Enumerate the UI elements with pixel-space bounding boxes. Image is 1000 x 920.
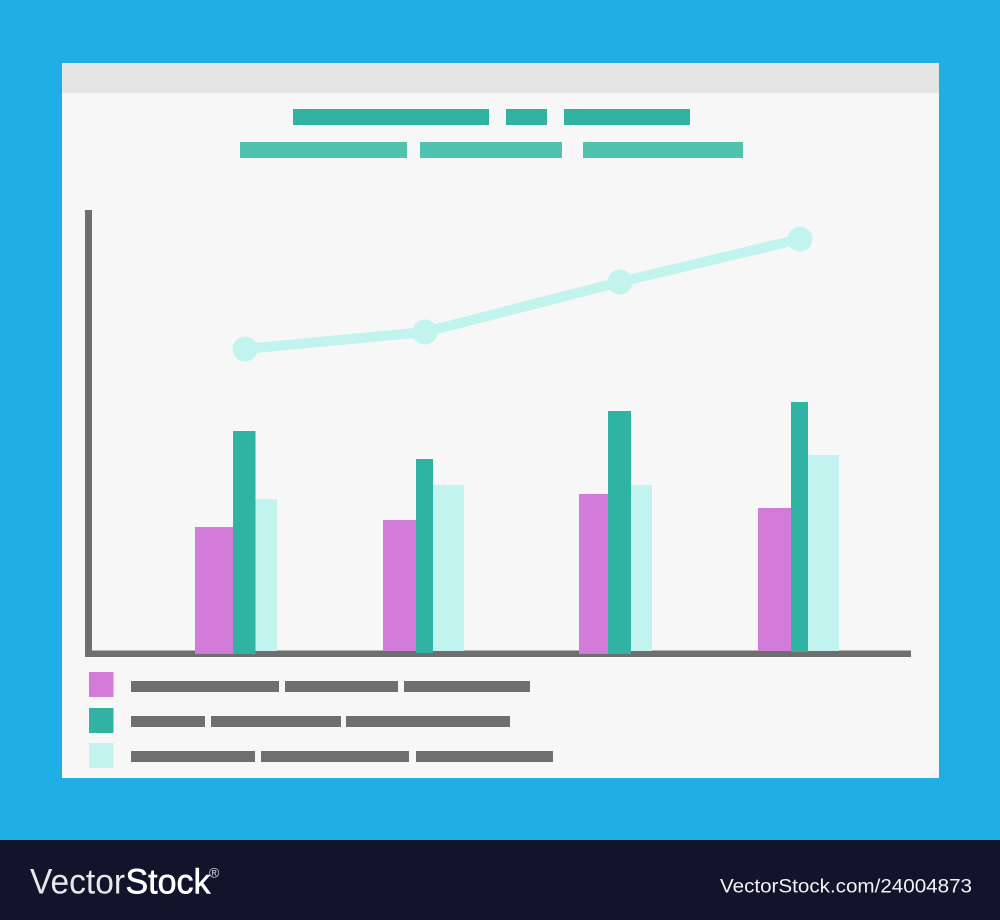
bar group 4 [758, 402, 839, 652]
chart axes [85, 210, 911, 657]
heading line 2 placeholder [240, 142, 743, 158]
watermark logo text: Vector [30, 862, 125, 902]
legend [89, 672, 553, 768]
watermark url text: VectorStock.com/24004873 [720, 876, 972, 898]
legend row 1 [89, 672, 530, 697]
bar group 3 [579, 411, 652, 654]
legend row 2 [89, 708, 510, 733]
watermark logo text: Stock [126, 862, 211, 902]
registered mark: ® [209, 864, 220, 880]
panel: chart window [62, 63, 939, 778]
line chart [232, 226, 812, 362]
bar group 2 [383, 459, 464, 653]
window title bar [62, 63, 939, 93]
bar group 1 [195, 431, 277, 654]
watermark logo text [30, 862, 211, 902]
bar chart [195, 402, 839, 654]
legend row 3 [89, 743, 553, 768]
heading line 1 placeholder [293, 109, 690, 125]
footer bar [0, 840, 1000, 920]
